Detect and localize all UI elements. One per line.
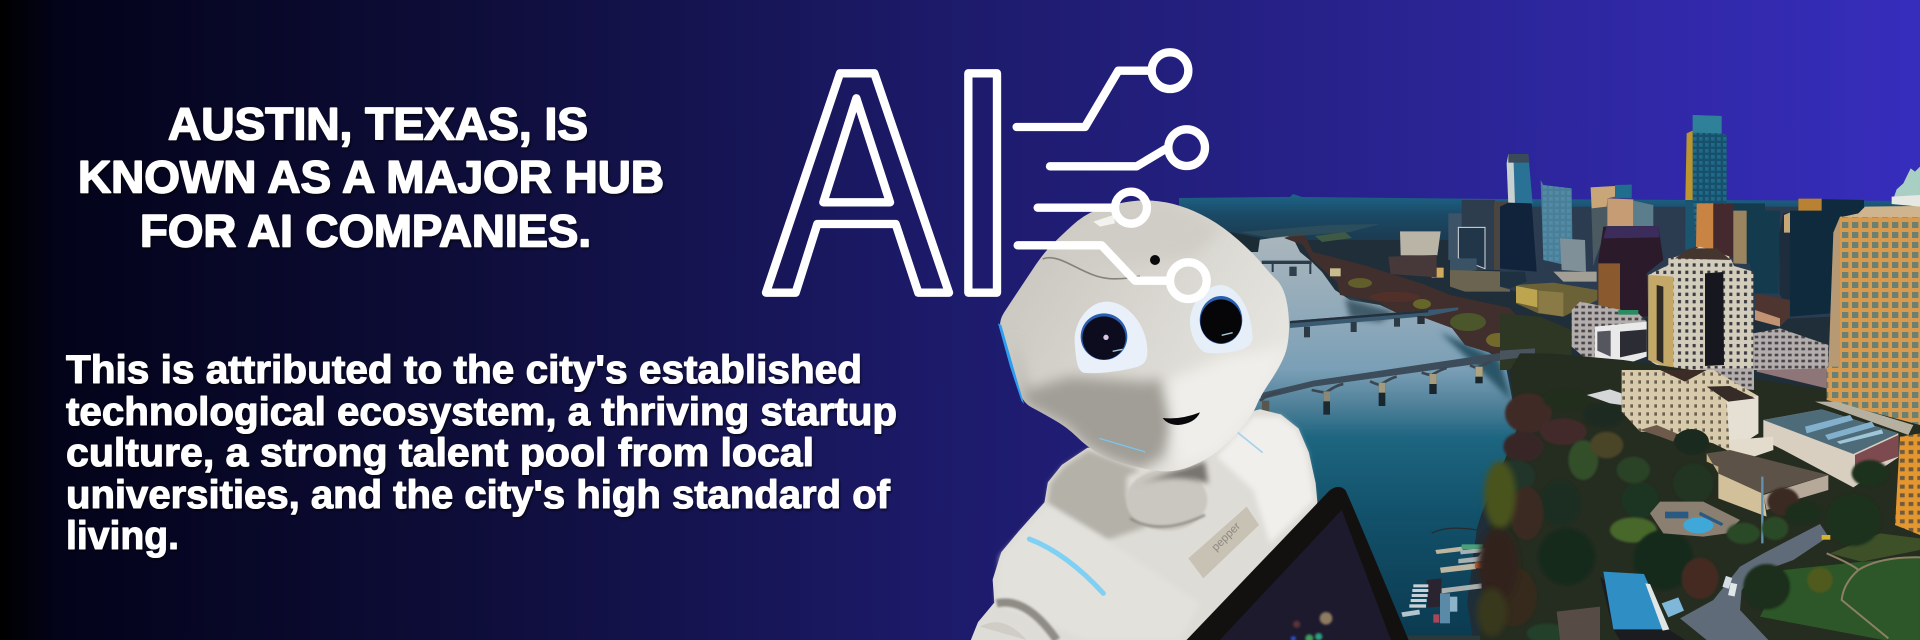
body paragraph: living. xyxy=(66,514,179,558)
South First bridge xyxy=(1290,307,1458,337)
body paragraph: culture, a strong talent pool from local xyxy=(66,431,814,475)
body paragraph: technological ecosystem, a thriving startup xyxy=(66,390,897,434)
park patch on far land xyxy=(1315,232,1352,242)
trees at foot xyxy=(1500,313,1572,370)
brown pavilion xyxy=(1755,293,1790,327)
marina docks xyxy=(1401,528,1507,640)
hotel with dark roofs xyxy=(1622,370,1758,452)
white building xyxy=(1572,302,1647,363)
AI circuit logo xyxy=(766,52,1207,299)
orange block xyxy=(1696,203,1713,253)
tree base xyxy=(1480,353,1920,640)
tower far left xyxy=(1507,154,1533,204)
heading: AUSTIN, TEXAS, IS xyxy=(168,98,588,150)
circuit line 1 xyxy=(1017,52,1188,127)
upper tower continuation xyxy=(1827,367,1920,425)
big blue-roof building xyxy=(1763,409,1898,487)
dark pavilion base xyxy=(1600,577,1685,640)
brow line xyxy=(1043,258,1140,279)
forehead sensor xyxy=(1150,255,1160,265)
Congress Avenue arched bridge xyxy=(1260,351,1510,415)
far-left dark bank xyxy=(1230,232,1260,252)
cream office tower xyxy=(1648,247,1753,370)
body paragraph xyxy=(66,348,897,558)
cheek light xyxy=(1099,438,1145,452)
park paths xyxy=(1827,553,1920,638)
orange block xyxy=(1895,433,1920,535)
nameplate: pepper xyxy=(1210,520,1243,554)
tree canopy blobs xyxy=(1505,393,1552,433)
swimming pool xyxy=(1683,517,1713,533)
dark teal block xyxy=(1733,203,1780,293)
mid-ground buildings left of downtown xyxy=(1330,200,1511,292)
neck xyxy=(1126,469,1207,531)
pool deck xyxy=(1650,502,1740,537)
mouth xyxy=(1163,412,1200,425)
bright chest xyxy=(1217,417,1314,543)
light streak on far land xyxy=(1240,224,1380,238)
downtown tower cluster xyxy=(1500,115,1920,370)
shoulder shadow xyxy=(1047,450,1147,540)
maroon tower xyxy=(1598,226,1663,317)
slim glass tower xyxy=(1541,180,1573,267)
robot head xyxy=(993,197,1293,477)
parked vans xyxy=(1722,576,1732,589)
left eye xyxy=(1075,302,1147,373)
main glass skyscraper xyxy=(1685,115,1727,250)
circuit line 4 xyxy=(1018,245,1207,299)
tan tower xyxy=(1591,185,1632,267)
main lawn xyxy=(1760,557,1920,640)
letter A xyxy=(766,73,949,293)
shoreline trees near marina xyxy=(1477,461,1518,636)
black tower xyxy=(1779,212,1792,317)
arm joint xyxy=(997,602,1057,640)
circuit line 3 xyxy=(1038,192,1147,224)
trees mid xyxy=(1727,523,1760,544)
side light strip xyxy=(998,323,1024,404)
low grey building xyxy=(1753,328,1828,370)
nameplate xyxy=(1188,507,1259,578)
robot torso xyxy=(973,412,1315,640)
right residential tower xyxy=(1828,213,1920,370)
distant hills on the horizon xyxy=(1179,194,1920,320)
autumn trees along upper bank xyxy=(1284,232,1540,356)
Lady Bird Lake river xyxy=(1180,236,1517,640)
right eye xyxy=(1190,285,1253,353)
lamp post xyxy=(1759,477,1766,543)
yellow midrise xyxy=(1516,283,1597,317)
reflections near tree line xyxy=(1345,298,1395,322)
blue roof xyxy=(1603,572,1668,629)
body paragraph: This is attributed to the city's established xyxy=(66,348,862,392)
heading: KNOWN AS A MAJOR HUB xyxy=(78,152,664,203)
chest light xyxy=(1237,432,1263,453)
robot Pepper xyxy=(973,197,1410,640)
dark tower left xyxy=(1500,203,1537,272)
lower district xyxy=(1480,353,1920,640)
letter I xyxy=(968,73,997,293)
plaza left xyxy=(1557,607,1600,640)
upper lawn xyxy=(1830,533,1920,562)
rear dusk layer xyxy=(1500,207,1833,320)
shoulder light strip xyxy=(1029,539,1103,593)
land base xyxy=(1280,240,1920,640)
body paragraph: universities, and the city's high standard of xyxy=(66,473,891,517)
heading xyxy=(78,98,664,257)
photo: Austin skyline and river xyxy=(1179,115,1920,640)
heading: FOR AI COMPANIES. xyxy=(140,206,591,257)
tablet xyxy=(1183,487,1410,640)
flat-roof pavilion xyxy=(1730,437,1773,457)
road and plaza xyxy=(1680,524,1828,640)
far bridge xyxy=(1262,261,1312,276)
circuit line 2 xyxy=(1050,129,1205,166)
